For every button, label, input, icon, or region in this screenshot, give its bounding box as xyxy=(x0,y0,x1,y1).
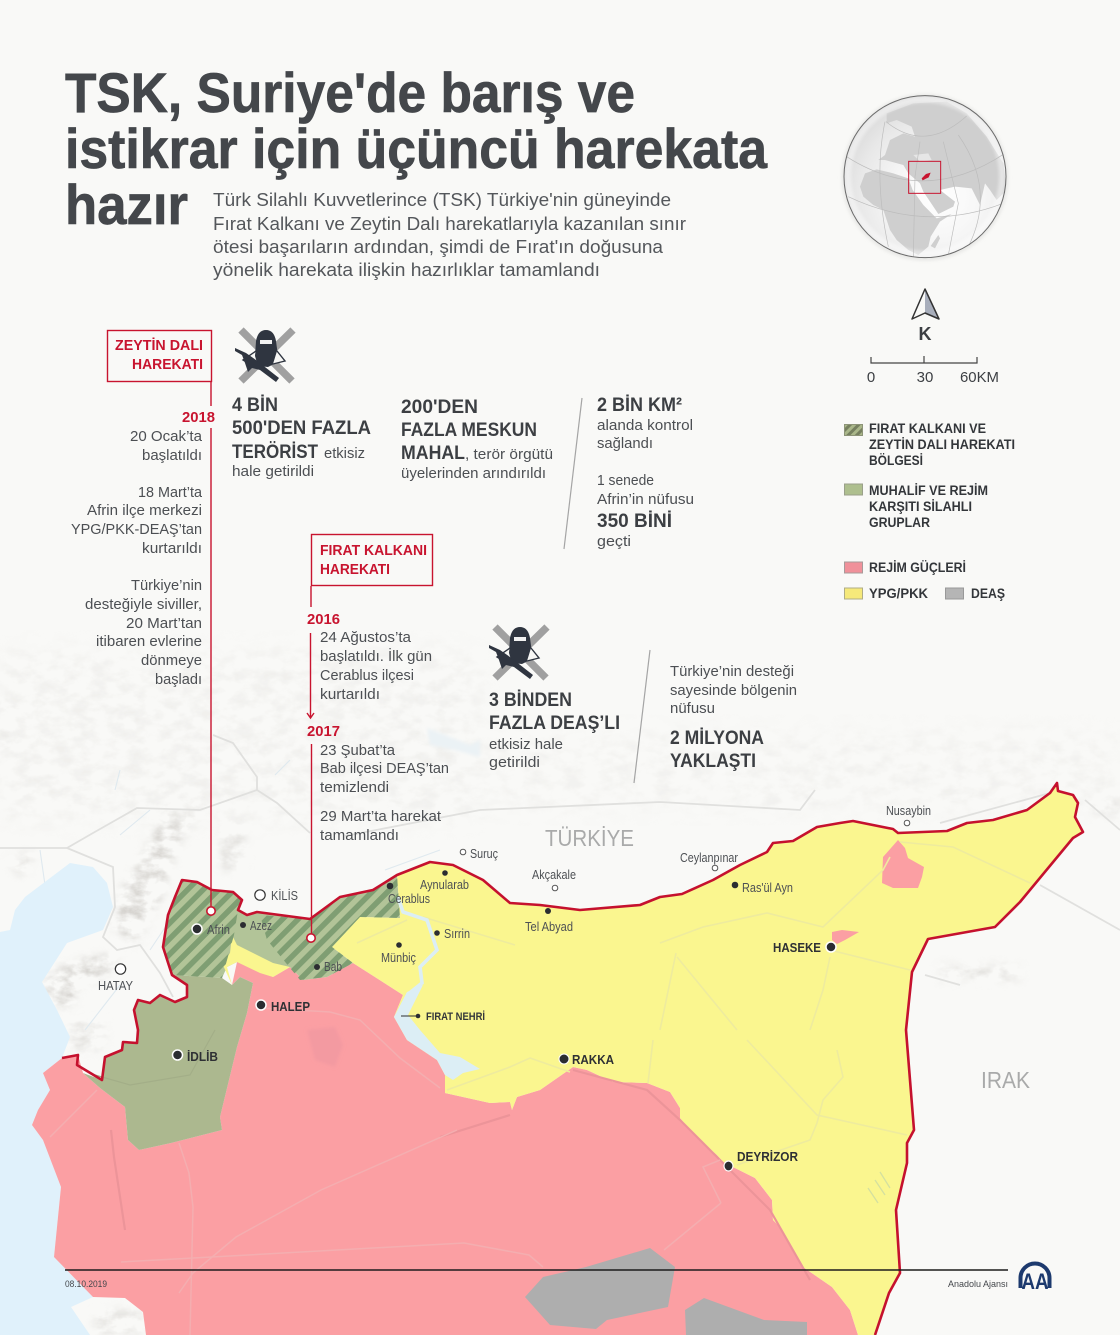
zone: regime forces xyxy=(32,962,858,1335)
map base terrain xyxy=(0,600,1120,1335)
events: desteğiyle siviller, xyxy=(85,596,202,613)
stat: 2 milyona yaklaştı xyxy=(670,663,797,772)
stat: 2 bin km2: alanda kontrol xyxy=(597,417,693,434)
stat: 2 milyona yaklaştı: 2 MİLYONA xyxy=(670,728,764,749)
scale bar: 60KM xyxy=(960,369,999,386)
subtitle: ötesi başarıların ardından, şimdi de Fırat'ın doğusuna xyxy=(213,237,664,257)
divider xyxy=(634,650,650,783)
stat: 2 bin km2 xyxy=(597,395,694,550)
north arrow: K xyxy=(918,324,932,344)
events 2016: başlatıldı. İlk gün xyxy=(320,647,432,665)
stat: 2 milyona yaklaştı: nüfusu xyxy=(670,700,715,717)
events 2017: tamamlandı xyxy=(320,827,399,844)
zone: regime enclave Haseke xyxy=(832,930,859,944)
zone: regime enclave Qamishli xyxy=(882,840,924,888)
zone: opposition groups (Idlib) xyxy=(83,975,253,1150)
subtitle xyxy=(213,190,686,280)
hatch: Fırat Kalkanı area xyxy=(260,875,400,980)
timeline: Fırat Kalkanı xyxy=(307,534,449,942)
stat: 2 bin km2: 350 BİNİ xyxy=(597,511,672,532)
city labels xyxy=(98,803,931,1171)
source: Anadolu Ajansı xyxy=(948,1279,1008,1290)
relief on regime area xyxy=(307,1027,343,1067)
events: 18 Mart’ta xyxy=(138,484,203,501)
stat: 4 bin terörist: 4 BİN xyxy=(232,395,278,416)
legend: YPG/PKK xyxy=(844,586,928,601)
stat: 200 meskun mahal xyxy=(401,397,553,482)
country labels: IRAK xyxy=(981,1067,1031,1093)
city labels: Münbiç xyxy=(381,950,416,965)
city labels: Suruç xyxy=(470,846,498,861)
timeline marker xyxy=(207,907,215,915)
city labels: FIRAT NEHRİ xyxy=(426,1010,485,1023)
events: kurtarıldı xyxy=(142,540,202,557)
map: control zones xyxy=(32,783,1083,1335)
legend: opposition xyxy=(844,483,988,530)
events xyxy=(71,428,203,688)
city labels: Nusaybin xyxy=(886,803,931,818)
legend: hatched area xyxy=(844,421,1015,468)
events: 20 Mart’tan xyxy=(126,615,202,632)
operation box xyxy=(108,330,212,382)
subtitle: yönelik harekata ilişkin hazırlıklar tamamlandı xyxy=(213,260,600,280)
stat: 4 bin terörist: 500'DEN FAZLA xyxy=(232,418,371,439)
city labels: Ras'ül Ayn xyxy=(742,880,793,895)
stat: 200 meskun mahal: FAZLA MESKUN xyxy=(401,420,537,441)
Eurasia and Arabia xyxy=(878,102,1007,214)
Black Sea xyxy=(914,154,932,161)
events: Türkiye’nin xyxy=(131,577,202,594)
stat: 2 milyona yaklaştı: YAKLAŞTI xyxy=(670,751,756,772)
legend: regime: REJİM GÜÇLERİ xyxy=(869,560,966,575)
Madagascar xyxy=(931,235,940,248)
year 2016: 2016 xyxy=(307,611,340,628)
stat: 2 bin km2: sağlandı xyxy=(597,435,653,452)
events 2017: temizlendi xyxy=(320,779,389,796)
subtitle: Türk Silahlı Kuvvetlerince (TSK) Türkiye'nin güneyinde xyxy=(213,190,671,210)
events 2016: Cerablus ilçesi xyxy=(320,667,414,684)
stat: 200 meskun mahal: üyelerinden arındırıldı xyxy=(401,465,546,482)
city labels: Bab xyxy=(324,959,342,974)
legend: DEAŞ xyxy=(946,586,1005,601)
city labels: Ceylanpınar xyxy=(680,850,739,865)
city labels: KİLİS xyxy=(271,888,298,903)
scale bar: 30 xyxy=(917,369,933,386)
events 2016: kurtarıldı xyxy=(320,686,380,703)
stat: 3 binden fazla DEAŞ'lı: getirildi xyxy=(489,754,540,771)
events 2017: 23 Şubat’ta xyxy=(320,742,396,759)
scale bar xyxy=(867,356,999,386)
events: dönmeye xyxy=(141,652,202,669)
city labels: HALEP xyxy=(271,999,310,1014)
events 2016: 24 Ağustos’ta xyxy=(320,629,412,646)
legend: hatched area: BÖLGESİ xyxy=(869,453,923,468)
events 2016 xyxy=(320,629,432,703)
date: 08.10.2019 xyxy=(65,1279,107,1290)
country labels: TÜRKİYE xyxy=(545,825,634,851)
events 2017 xyxy=(320,742,449,844)
city labels: Afrin xyxy=(207,922,230,937)
events: 20 Ocak’ta xyxy=(130,428,203,445)
title: istikrar için üçüncü harekata xyxy=(65,117,768,180)
zone: YPG/PKK main xyxy=(332,783,1083,1335)
footer rule xyxy=(65,1269,1008,1271)
north arrow xyxy=(912,289,939,344)
operation name: FIRAT KALKANI xyxy=(320,542,427,559)
city labels: Akçakale xyxy=(532,867,576,882)
events: YPG/PKK-DEAŞ’tan xyxy=(71,521,202,538)
stat: 2 bin km2: 2 BİN KM² xyxy=(597,395,682,416)
operation name: HAREKATI xyxy=(132,356,203,373)
city labels: İDLİB xyxy=(187,1049,218,1064)
operation box xyxy=(312,534,432,586)
roads on map xyxy=(111,1070,810,1280)
legend: opposition: MUHALİF VE REJİM xyxy=(869,483,988,498)
stat: 2 bin km2: geçti xyxy=(597,533,631,550)
icon: crossed-out terrorist 2 xyxy=(489,627,547,679)
scale bar: 0 xyxy=(867,369,875,386)
border: Turkish-Syrian red line xyxy=(62,783,1083,1335)
title: hazır xyxy=(65,173,188,236)
rim highlight xyxy=(848,99,1002,254)
stat: 200 meskun mahal: , terör örgütü xyxy=(465,446,553,463)
stat: 200 meskun mahal: 200'DEN xyxy=(401,397,478,418)
year 2017: 2017 xyxy=(307,723,340,740)
operation name xyxy=(320,542,427,578)
city labels: RAKKA xyxy=(572,1052,615,1067)
events: Afrin ilçe merkezi xyxy=(87,502,202,519)
country labels xyxy=(545,825,1031,1093)
events 2017: Bab ilçesi DEAŞ’tan xyxy=(320,760,449,777)
year 2018: 2018 xyxy=(182,409,215,426)
events: başladı xyxy=(155,671,202,688)
operation name: ZEYTİN DALI xyxy=(115,337,203,354)
operation name xyxy=(115,337,203,373)
Africa xyxy=(860,169,952,255)
stat: 4 bin terörist: etkisiz xyxy=(324,445,365,462)
legend: hatched area: FIRAT KALKANI VE xyxy=(869,421,986,436)
timeline line with arrow xyxy=(307,586,314,933)
stat: 3 binden fazla DEAŞ'lı: etkisiz hale xyxy=(489,736,563,753)
legend: YPG/PKK: YPG/PKK xyxy=(869,586,928,601)
stat: 2 milyona yaklaştı: Türkiye’nin desteği xyxy=(670,663,794,680)
title xyxy=(65,61,768,236)
stat: 3 binden fazla DEAŞ'lı xyxy=(489,690,620,771)
city labels: Sırrin xyxy=(444,926,470,941)
city labels: HASEKE xyxy=(773,940,821,955)
timeline marker xyxy=(307,934,315,942)
city labels: Cerablus xyxy=(388,891,430,906)
stat: 4 bin terörist xyxy=(232,395,371,480)
city labels: Aynularab xyxy=(420,877,469,892)
city labels: DEYRİZOR xyxy=(737,1149,799,1164)
zone: opposition groups (Afrin - Azez - Bab) xyxy=(163,875,400,980)
logo: AA: AA xyxy=(1022,1269,1049,1294)
legend: opposition: GRUPLAR xyxy=(869,515,930,530)
events 2017: 29 Mart’ta harekat xyxy=(320,808,442,825)
events: itibaren evlerine xyxy=(96,633,202,650)
legend: DEAŞ: DEAŞ xyxy=(971,586,1005,601)
zone: DEAŞ xyxy=(525,1248,807,1335)
Syria marker xyxy=(922,173,931,180)
hatch: Zeytin Dalı area xyxy=(163,880,242,978)
stat: 2 bin km2: Afrin’in nüfusu xyxy=(597,491,694,508)
stat: 2 bin km2: 1 senede xyxy=(597,472,654,489)
divider xyxy=(564,398,582,549)
legend: opposition: KARŞITI SİLAHLI xyxy=(869,499,972,514)
timeline line xyxy=(210,382,212,906)
globe locator xyxy=(842,94,1008,261)
timeline: Zeytin Dalı xyxy=(71,330,215,915)
stat: 200 meskun mahal: MAHAL xyxy=(401,443,465,464)
icon: crossed-out terrorist 1 xyxy=(235,330,293,382)
stat: 3 binden fazla DEAŞ'lı: FAZLA DEAŞ’LI xyxy=(489,713,620,734)
graticule xyxy=(847,116,1005,257)
lake xyxy=(394,985,480,1080)
legend xyxy=(844,421,1015,601)
river: Fırat xyxy=(398,897,437,995)
stat: 4 bin terörist: hale getirildi xyxy=(232,463,314,480)
city labels: Tel Abyad xyxy=(525,919,573,934)
stat: 4 bin terörist: TERÖRİST xyxy=(232,442,318,463)
city labels: Azez xyxy=(250,918,272,933)
title: TSK, Suriye'de barış ve xyxy=(65,61,635,124)
events: başlatıldı xyxy=(142,447,202,464)
locator box xyxy=(909,161,941,193)
sea xyxy=(0,863,113,1335)
city labels: HATAY xyxy=(98,978,133,993)
legend: hatched area: ZEYTİN DALI HAREKATI xyxy=(869,437,1015,452)
operation name: HAREKATI xyxy=(320,561,390,578)
stat: 3 binden fazla DEAŞ'lı: 3 BİNDEN xyxy=(489,690,572,711)
stat: 2 milyona yaklaştı: sayesinde bölgenin xyxy=(670,682,797,699)
zone: YPG/PKK pocket xyxy=(222,935,290,985)
subtitle: Fırat Kalkanı ve Zeytin Dalı harekatlarıyla kazanılan sınır xyxy=(213,214,686,234)
